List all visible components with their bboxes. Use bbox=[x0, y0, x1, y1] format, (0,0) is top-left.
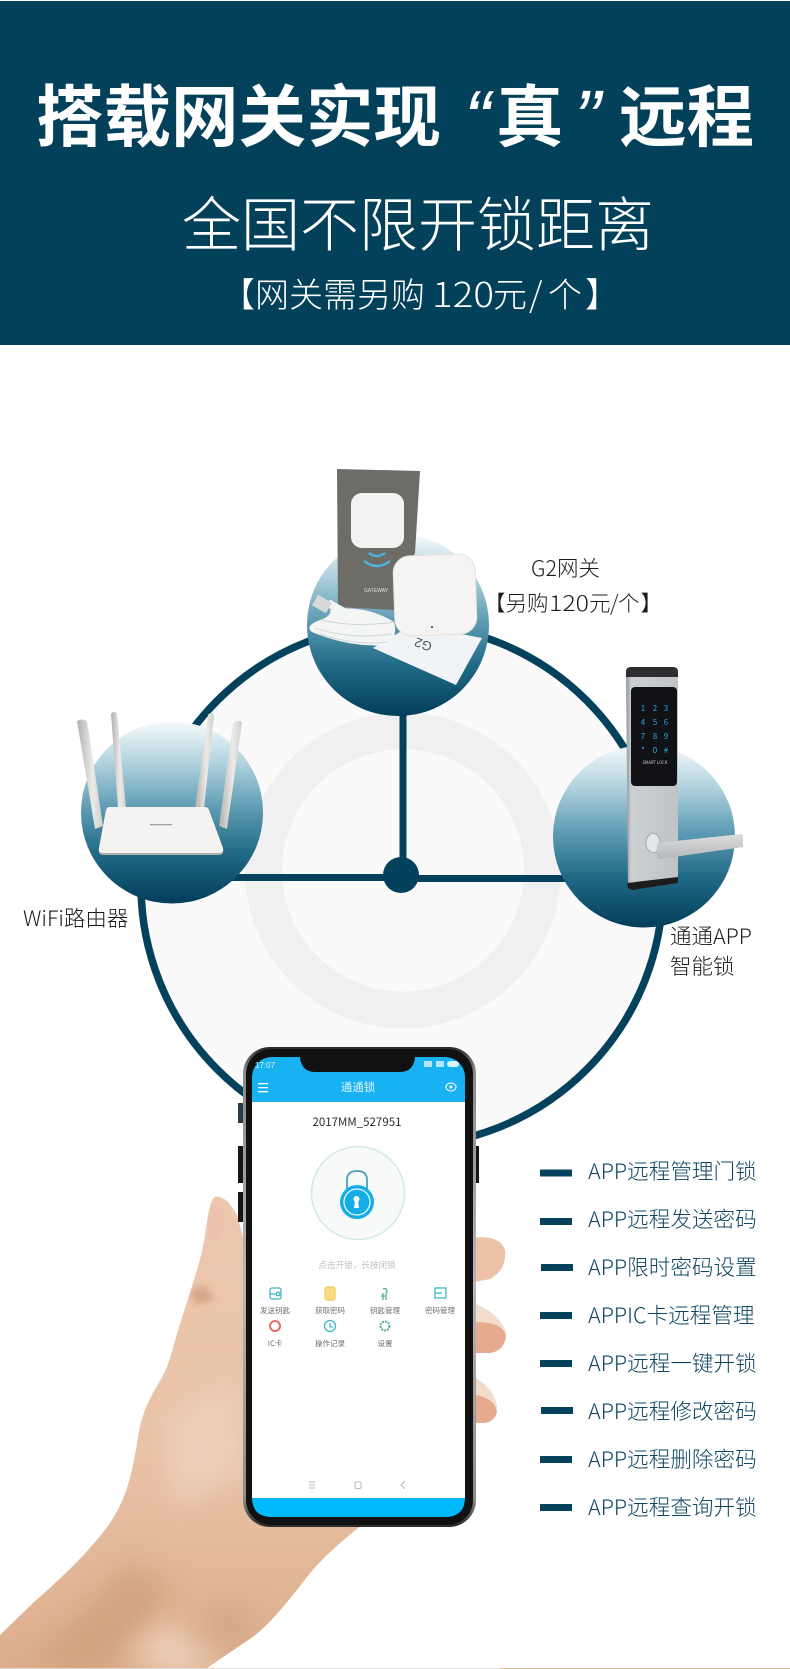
keypad: 3 bbox=[664, 703, 668, 714]
inner grey ring bbox=[264, 731, 542, 1010]
gateway box bbox=[337, 469, 420, 610]
app header: 通通锁 bbox=[341, 1079, 376, 1095]
white cable bbox=[309, 595, 395, 645]
label: smart lock: 智能锁 bbox=[670, 950, 735, 981]
gateway box: GATEWAY bbox=[364, 588, 389, 594]
label: G2 gateway: 【 bbox=[484, 587, 506, 618]
feature 6: APP远程修改密码 bbox=[588, 1395, 757, 1426]
app function labels: 密码管理 bbox=[425, 1305, 455, 1316]
feature 4: APPIC卡远程管理 bbox=[588, 1299, 755, 1330]
app function labels: IC卡 bbox=[268, 1338, 283, 1349]
title: 远程 bbox=[619, 64, 754, 161]
router body bbox=[99, 807, 223, 855]
status bar bbox=[255, 1061, 459, 1070]
keypad: 5 bbox=[653, 717, 657, 728]
keypad: 4 bbox=[641, 717, 646, 728]
lever handle bbox=[646, 834, 743, 859]
app header bbox=[258, 1079, 456, 1095]
hint text: 点击开锁，长按闭锁 bbox=[318, 1259, 396, 1271]
app function labels: 操作记录 bbox=[315, 1338, 345, 1349]
feature 8: APP远程查询开锁 bbox=[588, 1491, 757, 1522]
side buttons bbox=[238, 1103, 479, 1222]
app function icons bbox=[270, 1287, 446, 1332]
phone body bbox=[243, 1047, 476, 1527]
gateway device bbox=[393, 554, 477, 636]
app function labels: 获取密码 bbox=[315, 1305, 345, 1316]
label: smart lock: 通通APP bbox=[670, 920, 752, 951]
keypad: * bbox=[641, 745, 645, 756]
keypad: 1 bbox=[641, 703, 645, 714]
label: G2 gateway: 元 bbox=[589, 587, 611, 618]
lock plate bbox=[626, 667, 678, 890]
keypad: SMART LOCK bbox=[642, 760, 668, 766]
app function labels bbox=[260, 1305, 455, 1349]
keypad: 0 bbox=[653, 745, 658, 756]
subtitle: 全国不限开锁距离 bbox=[182, 178, 654, 263]
smartphone bbox=[238, 1047, 479, 1527]
label: G2 gateway: / bbox=[610, 587, 619, 618]
label: G2 gateway: 】 bbox=[640, 587, 662, 618]
label: WiFi router: WiFi路由器 bbox=[23, 902, 128, 933]
price note: 【网关需另购 bbox=[221, 268, 425, 317]
navigation keys bbox=[309, 1481, 405, 1489]
keypad: # bbox=[664, 745, 669, 756]
instruction paper: G2 bbox=[412, 635, 434, 655]
feature 5: APP远程一键开锁 bbox=[588, 1347, 757, 1378]
keypad: 8 bbox=[653, 731, 658, 742]
lock button bbox=[312, 1146, 404, 1240]
price note: / bbox=[529, 268, 543, 317]
label: G2 gateway: 另购 bbox=[506, 587, 549, 618]
label: G2 gateway bbox=[484, 552, 662, 618]
keypad: 6 bbox=[664, 717, 669, 728]
keypad: 7 bbox=[641, 731, 646, 742]
feature 7: APP远程删除密码 bbox=[588, 1443, 757, 1474]
fingers behind phone bbox=[470, 1237, 506, 1423]
instruction paper bbox=[373, 630, 482, 685]
notch bbox=[300, 1050, 415, 1072]
status bar: 17:07 bbox=[255, 1061, 276, 1070]
header banner bbox=[0, 1, 790, 345]
price note: 个 bbox=[548, 268, 582, 317]
connector lines and hub bbox=[230, 700, 566, 893]
bottom edge line bbox=[0, 1668, 790, 1669]
router product circle bbox=[77, 712, 263, 904]
antennas bbox=[77, 712, 242, 829]
feature list bbox=[540, 1155, 757, 1522]
app function labels: 设置 bbox=[378, 1338, 393, 1349]
label: smart lock bbox=[670, 920, 752, 981]
gateway product circle bbox=[307, 469, 489, 716]
keypad: 9 bbox=[664, 731, 668, 742]
feature 1: APP远程管理门锁 bbox=[588, 1155, 757, 1186]
label: G2 gateway: 个 bbox=[618, 587, 640, 618]
title quotes: “ bbox=[464, 74, 495, 163]
title quotes: ” bbox=[574, 74, 604, 163]
keypad: 2 bbox=[653, 703, 658, 714]
label: G2 gateway: 120 bbox=[549, 587, 589, 618]
title: 真 bbox=[496, 64, 564, 161]
app function labels: 钥匙管理 bbox=[370, 1305, 400, 1316]
screen bbox=[252, 1057, 465, 1517]
price note: 元 bbox=[493, 268, 527, 317]
label: G2 gateway: G2网关 bbox=[531, 552, 600, 583]
keypad bbox=[641, 703, 669, 766]
lock product circle bbox=[553, 667, 743, 928]
feature 3: APP限时密码设置 bbox=[588, 1251, 757, 1282]
feature 2: APP远程发送密码 bbox=[588, 1203, 757, 1234]
app function labels: 发送钥匙 bbox=[260, 1305, 290, 1316]
device name: 2017MM_527951 bbox=[313, 1114, 401, 1130]
price note: 120 bbox=[432, 268, 494, 317]
hand bbox=[0, 1196, 360, 1668]
title: 搭载网关实现 bbox=[36, 64, 441, 161]
price note: 】 bbox=[585, 268, 619, 317]
large outer ring bbox=[141, 624, 663, 1146]
